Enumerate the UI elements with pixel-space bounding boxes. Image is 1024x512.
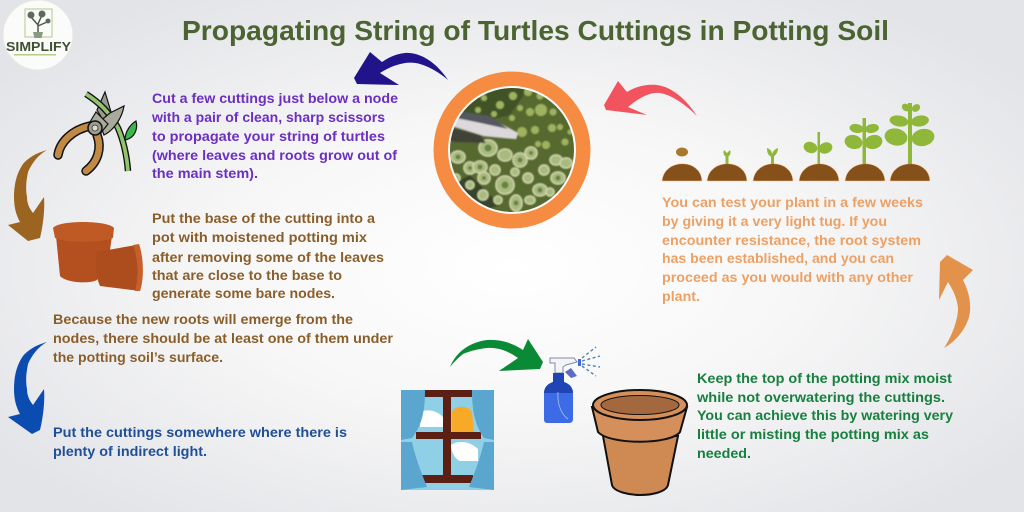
text: step four misting: Keep the top of the potting mix moist xyxy=(697,371,953,386)
icon: window with curtains xyxy=(401,390,494,490)
text: step one cutting xyxy=(151,91,399,181)
arrow: blue, potting to light xyxy=(8,342,47,434)
arrow: orange, misting to testing xyxy=(939,255,973,348)
icon: spray bottle xyxy=(544,347,600,423)
arrow: brown, shears to pots xyxy=(8,150,47,241)
arrow: green, window to spray xyxy=(450,339,543,371)
text: step four misting xyxy=(696,371,954,461)
text: step five testing: You can test your plant in a few weeks xyxy=(662,195,923,210)
text: step two potting: pot with moistened potting mix xyxy=(152,230,368,245)
photo: string of turtles with scissors xyxy=(434,72,590,228)
text: step two roots note: Because the new roots will emerge from the xyxy=(53,312,354,327)
text: step five testing: has been established, and you can xyxy=(662,251,894,266)
text: step two potting: Put the base of the cutting into a xyxy=(152,211,376,226)
text: step two potting: generate some bare nodes. xyxy=(152,286,335,301)
logo badge: SIMPLIFY xyxy=(6,39,71,54)
icon: clay pot xyxy=(592,390,687,495)
text: step two roots note: nodes, there should be at least one of them under xyxy=(53,331,394,346)
icon: plant growth stages xyxy=(662,102,936,181)
arrow: navy, photo to first step xyxy=(354,52,448,85)
text: step one cutting: Cut a few cuttings just below a node xyxy=(152,91,399,106)
text: step one cutting: to propagate your string of turtles xyxy=(152,129,385,144)
text: step four misting: You can achieve this by watering very xyxy=(697,408,954,423)
text: step five testing: encounter resistance, the root system xyxy=(662,233,921,248)
title: Propagating String of Turtles Cuttings in Potting Soil xyxy=(182,15,889,46)
text: step one cutting: with a pair of clean, sharp scissors xyxy=(151,110,385,125)
arrow: red, plant growth to photo xyxy=(604,81,697,116)
icon: seed and soil mounds xyxy=(662,164,930,181)
text: step four misting: while not overwatering the cuttings. xyxy=(696,390,945,405)
text: step five testing: by giving it a very light tug. If you xyxy=(662,214,887,229)
text: step three light xyxy=(53,425,347,459)
text: step four misting: little or misting the potting mix as xyxy=(697,427,929,442)
logo badge xyxy=(3,0,73,70)
icon: sprouts xyxy=(723,102,936,164)
text: step one cutting: (where leaves and roots grow out of xyxy=(152,148,398,163)
text: step four misting: needed. xyxy=(697,446,751,461)
text: step two potting xyxy=(152,211,384,301)
text: step three light: plenty of indirect light. xyxy=(53,444,207,459)
text: step three light: Put the cuttings somewhere where there is xyxy=(53,425,347,440)
text: step two roots note xyxy=(53,312,394,365)
icon: pruning shears with stem xyxy=(58,92,137,171)
text: step five testing xyxy=(662,195,923,304)
text: step two potting: that are close to the base to xyxy=(152,268,342,283)
text: step five testing: plant. xyxy=(662,289,700,304)
icon: terracotta pots xyxy=(53,222,143,291)
text: step two roots note: the potting soil’s surface. xyxy=(53,350,223,365)
text: step five testing: proceed as you would with any other xyxy=(662,270,914,285)
text: step two potting: after removing some of the leaves xyxy=(152,250,384,265)
text: step one cutting: the main stem). xyxy=(152,166,258,181)
